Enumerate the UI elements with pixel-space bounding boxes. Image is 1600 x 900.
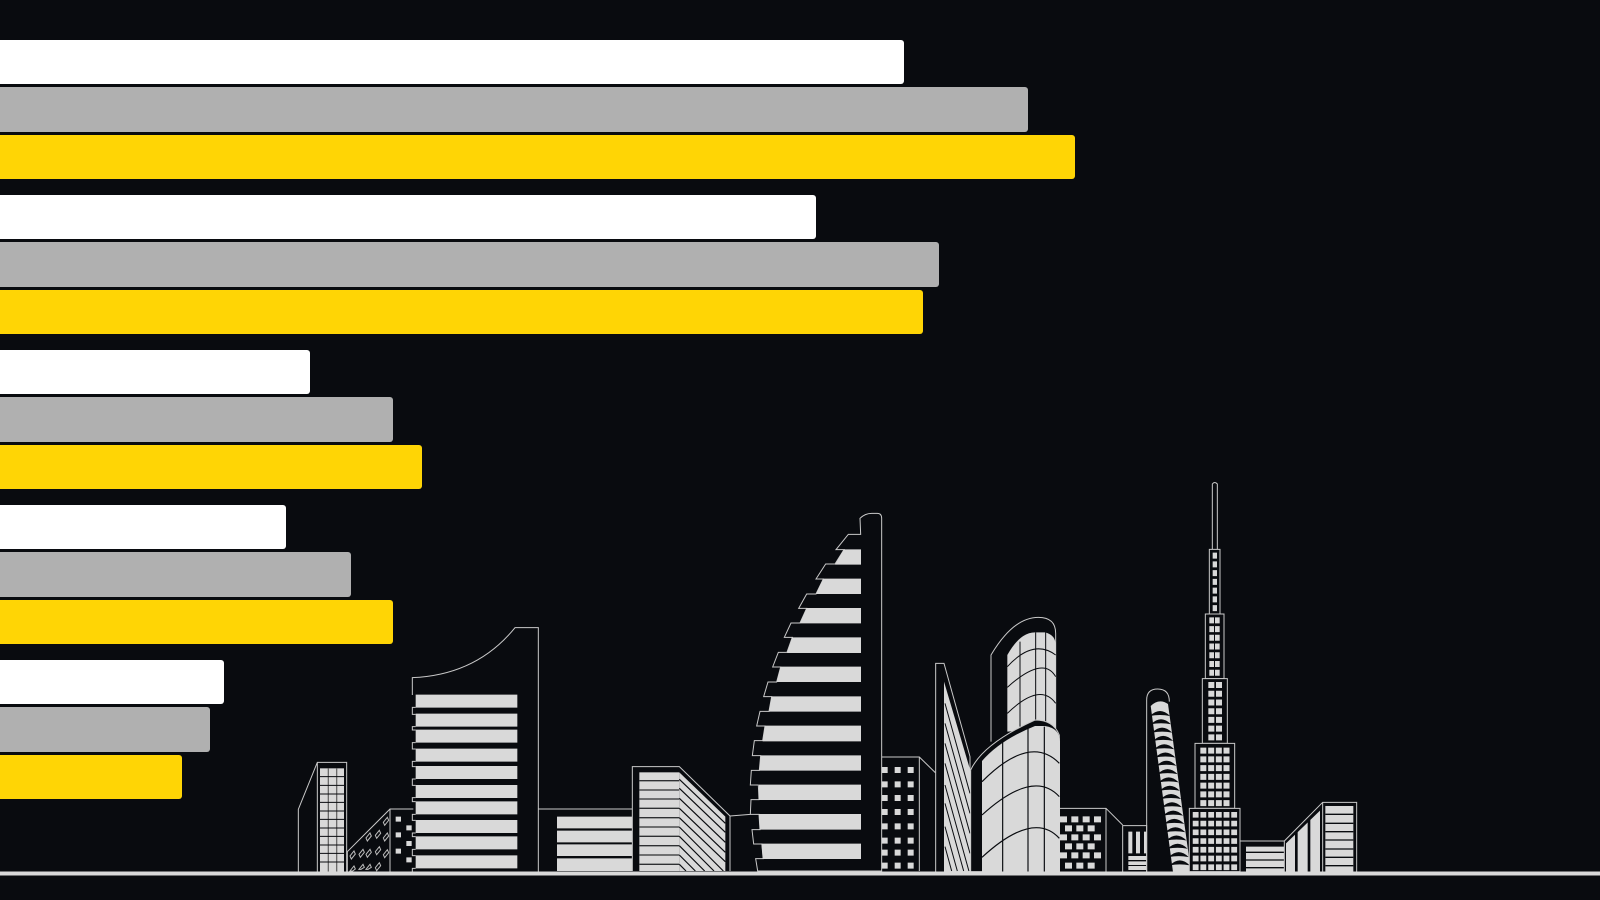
bar chart [0,40,1075,799]
building: wedge tower [936,663,971,872]
bar: white [0,40,904,84]
building: twisted tower outline [1147,689,1169,872]
building: brick-window block [1060,808,1123,872]
bar group 2 [0,195,939,334]
building: slanted right block [1284,802,1357,872]
building: square-window block [882,757,935,871]
ground line [0,872,1600,876]
building: spire tower [1189,482,1240,872]
building: twisted tower stripes [1150,701,1191,872]
bar: gray [0,397,393,442]
building: low block [538,809,632,871]
building: small block [1123,826,1147,872]
building: sail tower [730,513,882,871]
bar: white [0,505,286,549]
bar: yellow [0,290,923,334]
skyline middle section [538,513,935,871]
skyline right section [1189,482,1357,872]
bar: gray [0,87,1028,132]
bar: white [0,350,310,394]
building: slanted block with diamond windows [347,809,413,872]
bar group 1 [0,40,1075,179]
bar: yellow [0,600,393,644]
bar: gray [0,242,939,287]
bar: yellow [0,445,422,489]
bar: yellow [0,755,182,799]
building: front curved tower [971,720,1060,872]
bar: white [0,195,816,239]
building: grid tower with slanted side [298,762,347,872]
bar group 5 [0,660,224,799]
skyline right-middle section [936,617,1169,872]
bar group 4 [0,505,393,644]
bar: gray [0,552,351,597]
bar: white [0,660,224,704]
building: rear curved tower [991,617,1056,742]
building: curved-top tower [412,628,538,872]
bar: gray [0,707,210,752]
building: striped block with slanted facade [632,767,730,871]
skyline illustration [0,482,1600,876]
building: low right block [1240,841,1284,872]
bar: yellow [0,135,1075,179]
bar group 3 [0,350,422,489]
skyline left section [298,628,538,872]
